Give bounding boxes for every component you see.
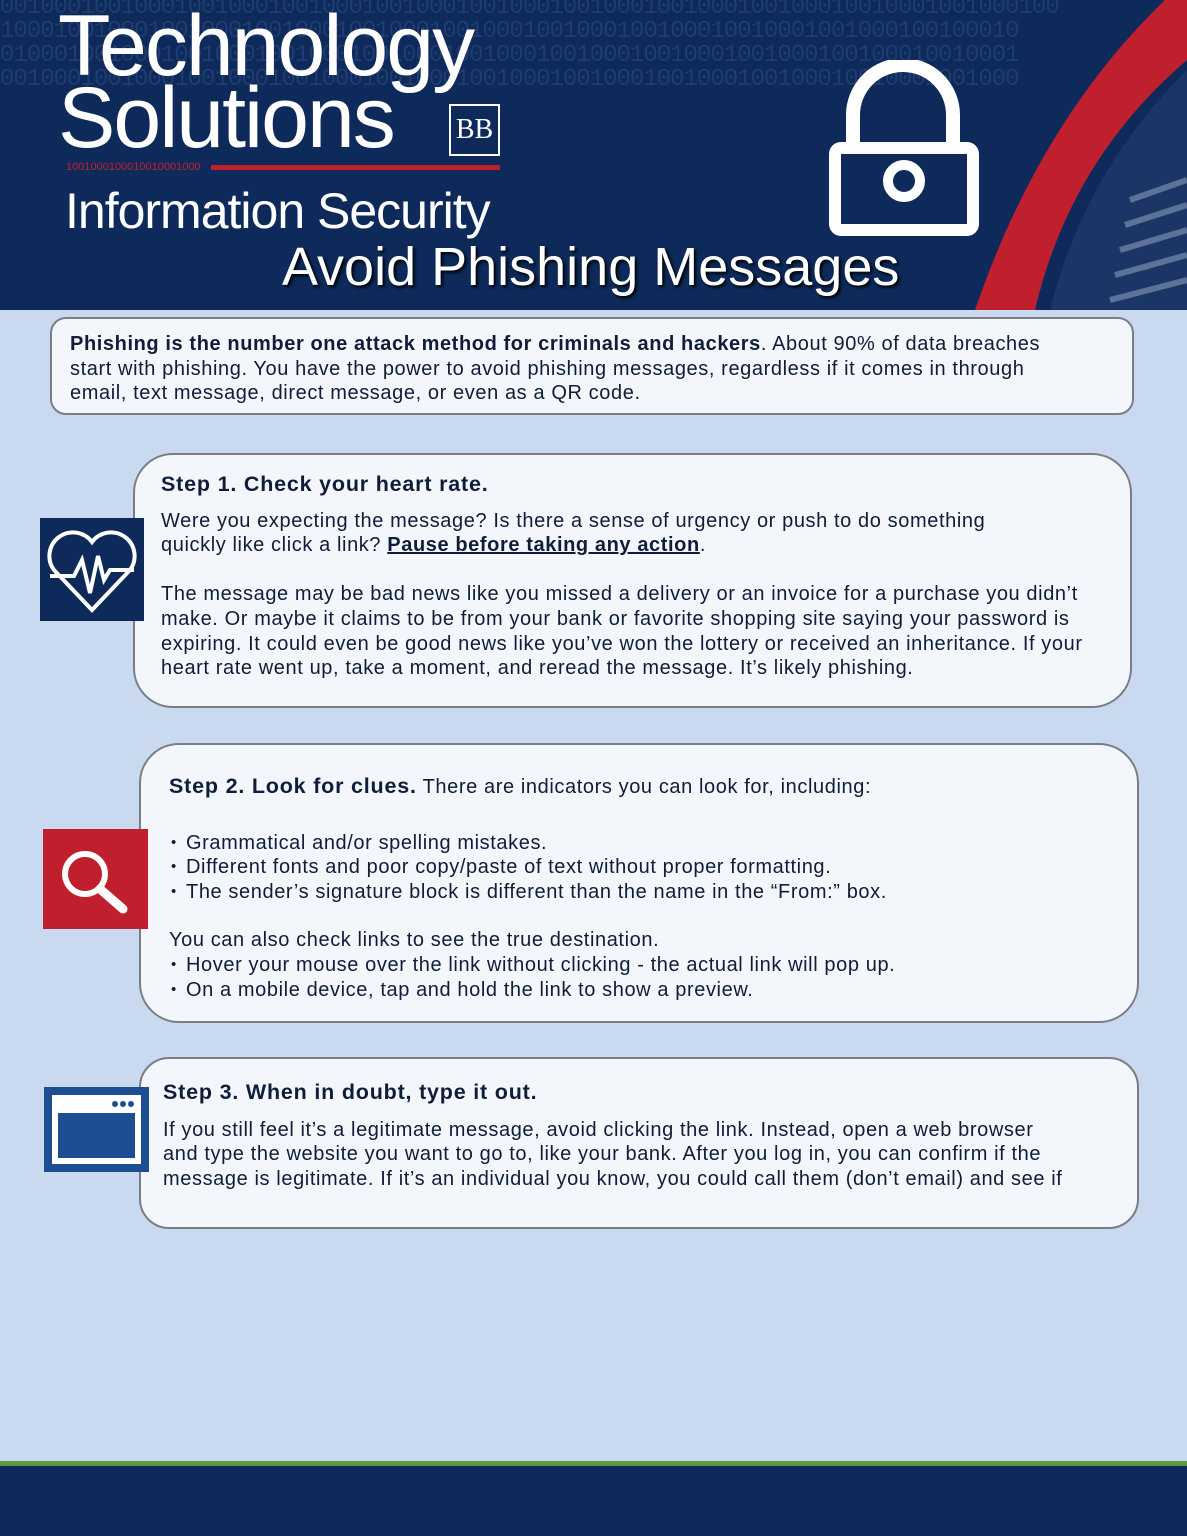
intro panel: email, text message, direct message, or even as a QR code. xyxy=(70,382,641,404)
icon: browser window xyxy=(44,1087,149,1172)
step 3 text: and type the website you want to go to, like your bank. After you log in, you can confirm if the xyxy=(163,1143,1041,1165)
BB logo: BB xyxy=(456,114,493,145)
panel: step 2: On a mobile device, tap and hold the link to show a preview. xyxy=(186,979,753,1001)
binary pattern xyxy=(0,0,1059,93)
step 1 heading: Step 1. Check your heart rate. xyxy=(161,472,488,496)
icon: heart rate xyxy=(40,518,144,621)
step 1 text: make. Or maybe it claims to be from your bank or favorite shopping site saying your password is xyxy=(161,608,1069,630)
step 1 text: expiring. It could even be good news like you’ve won the lottery or received an inheritance. If your xyxy=(161,633,1083,655)
footer bar xyxy=(0,1461,1187,1536)
step 1 text: The message may be bad news like you missed a delivery or an invoice for a purchase you didn’t xyxy=(161,583,1078,605)
icon: padlock xyxy=(829,60,979,236)
logo title: Technology xyxy=(58,0,473,94)
logo title: Solutions xyxy=(58,70,394,166)
step 3 text: If you still feel it’s a legitimate message, avoid clicking the link. Instead, open a web browser xyxy=(163,1119,1033,1141)
logo title xyxy=(58,0,475,166)
panel: step 2 xyxy=(139,743,1139,1023)
binary pattern: 0010001001000100100010010001001000100100010010001001000100100010010001001000 xyxy=(0,66,1019,93)
panel: step 2: Hover your mouse over the link without clicking - the actual link will pop up. xyxy=(186,954,895,976)
clue list xyxy=(172,832,887,903)
step 1 text: Were you expecting the message? Is there a sense of urgency or push to do something xyxy=(161,510,985,532)
step 3 text: message is legitimate. If it’s an individual you know, you could call them (don’t email) and see if xyxy=(163,1168,1062,1190)
BB logo xyxy=(449,104,500,156)
link tips: You can also check links to see the true destination. xyxy=(169,929,659,951)
clue list: Different fonts and poor copy/paste of text without proper formatting. xyxy=(186,856,831,878)
step 1 text xyxy=(161,510,1083,679)
intro panel: start with phishing. You have the power to avoid phishing messages, regardless if it comes in through xyxy=(70,358,1024,380)
red rule: 1001000100010010001000 xyxy=(66,161,201,173)
panel: step 3 xyxy=(139,1057,1139,1229)
panel: step 1 xyxy=(133,453,1132,708)
binary pattern: 1000100100010010001001000100100010010001001000100100010010001001000100100010 xyxy=(0,18,1019,45)
step 1 text: quickly like click a link? Pause before taking any action. xyxy=(161,534,706,556)
step 1 text: heart rate went up, take a moment, and reread the message. It’s likely phishing. xyxy=(161,657,913,679)
header banner xyxy=(0,0,1187,310)
step 2 heading: Step 2. Look for clues. There are indicators you can look for, including: xyxy=(169,774,871,798)
intro panel: Phishing is the number one attack method for criminals and hackers. About 90% of data breaches xyxy=(70,333,1040,355)
red rule xyxy=(66,161,500,173)
clue list: Grammatical and/or spelling mistakes. xyxy=(186,832,547,854)
binary pattern: 0100010010001001000100100010010001001000100100010010001001000100100010010001 xyxy=(0,42,1019,69)
step 3 text xyxy=(163,1119,1062,1190)
subtitle: Information Security xyxy=(65,183,490,239)
intro panel xyxy=(50,317,1134,415)
step 3 heading: Step 3. When in doubt, type it out. xyxy=(163,1080,537,1104)
red swoosh xyxy=(975,0,1187,310)
main title: Avoid Phishing Messages xyxy=(282,237,899,297)
icon: magnifier xyxy=(43,829,148,929)
clue list: The sender’s signature block is different than the name in the “From:” box. xyxy=(186,881,887,903)
